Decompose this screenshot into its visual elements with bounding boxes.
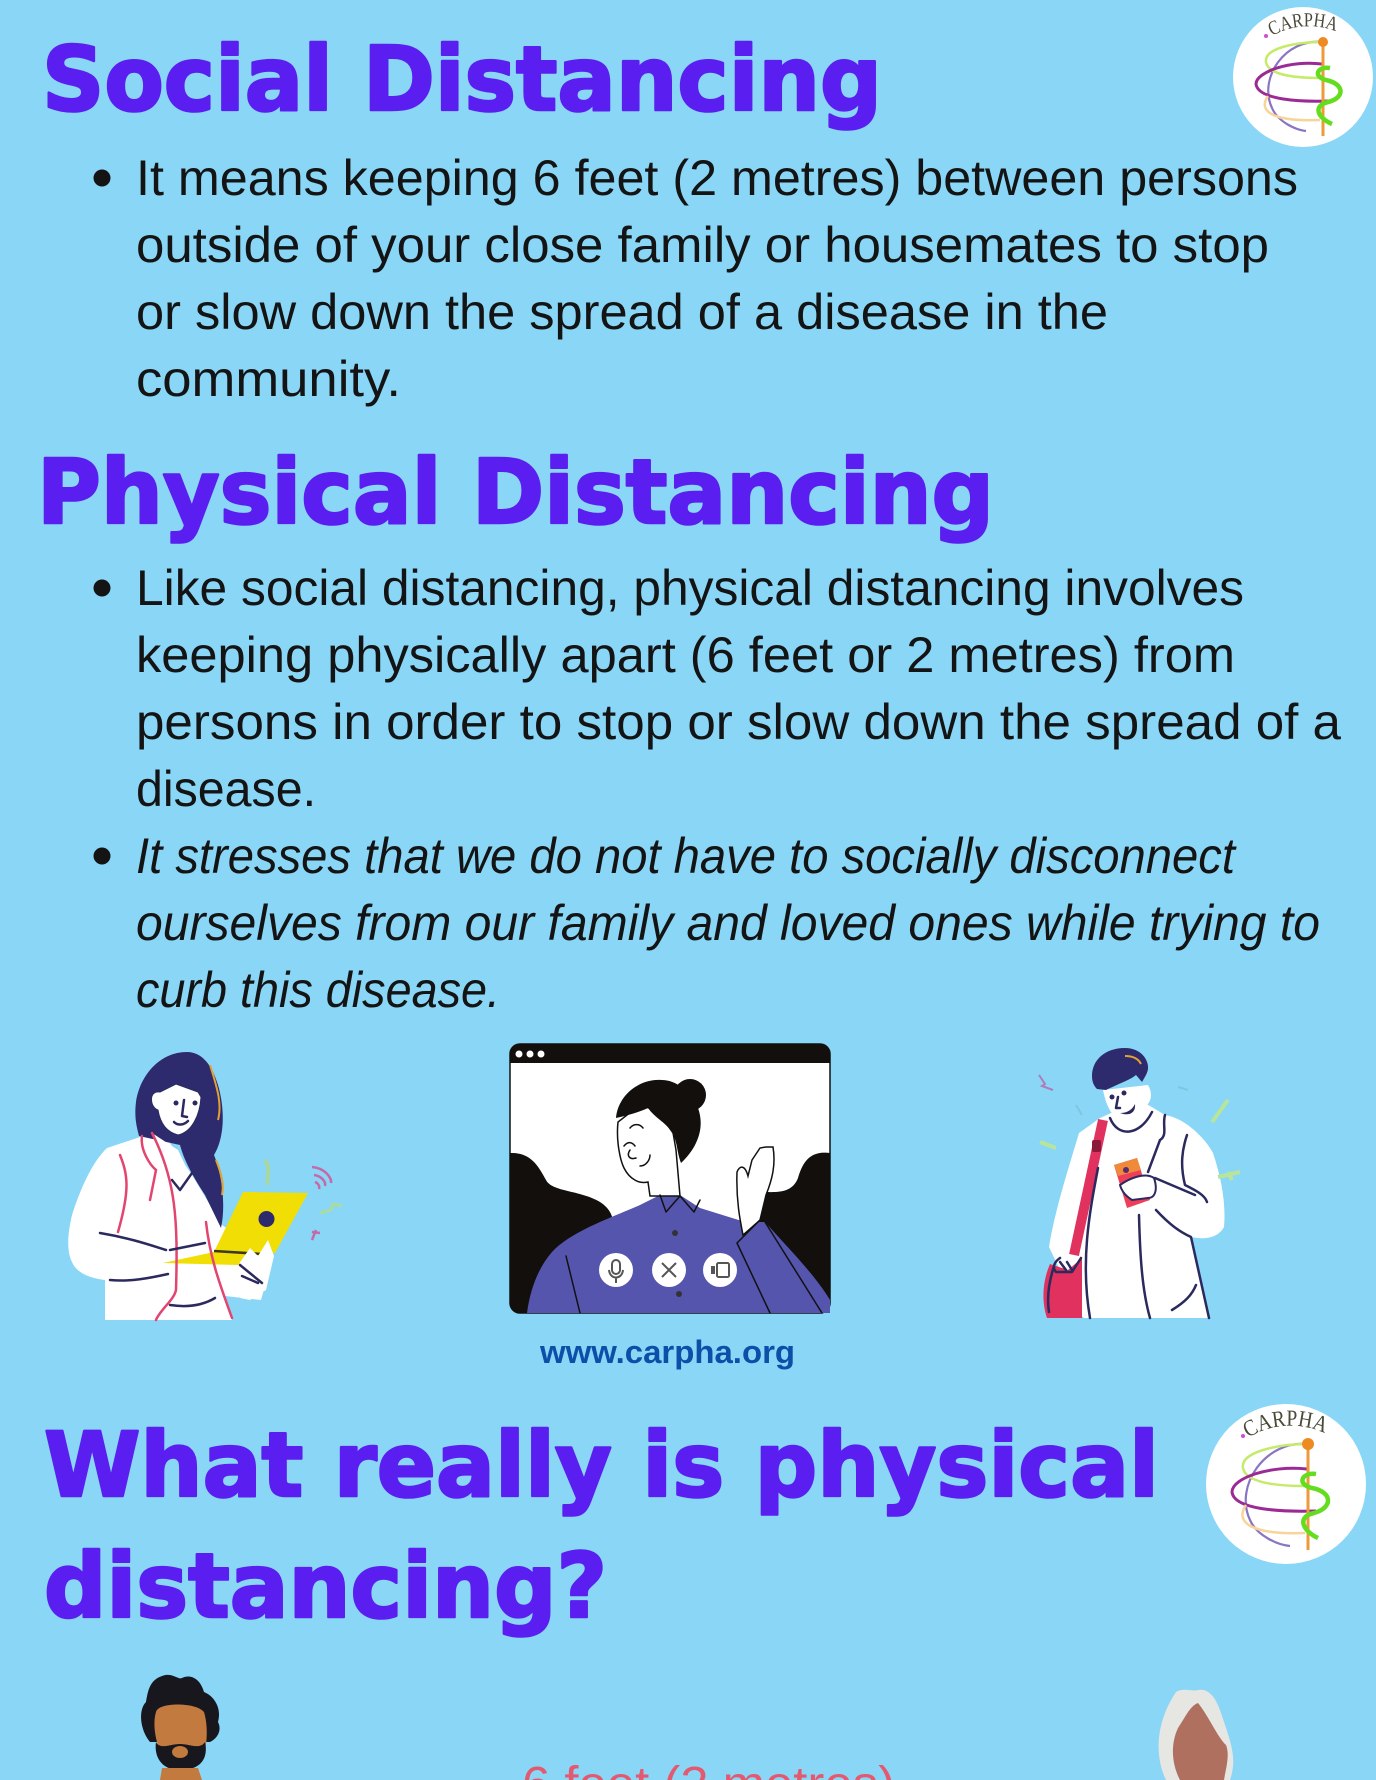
text block: social distancing definition: community. xyxy=(136,351,401,407)
icon: close button xyxy=(652,1253,686,1287)
heading: Social Distancing: Social Distancing xyxy=(42,27,882,131)
text block: social distancing definition: or slow down the spread of a disease in the xyxy=(136,284,1108,340)
website link: www.carpha.org xyxy=(539,1334,795,1370)
logo: CARPHA top: CARPHA xyxy=(1268,13,1336,34)
text block: italic note on staying connected: ourselves from our family and loved ones while trying to xyxy=(136,895,1320,951)
heading: Physical Distancing: Physical Distancing xyxy=(37,440,994,544)
logo: CARPHA top xyxy=(1233,7,1373,147)
text block: physical distancing definition: persons in order to stop or slow down the spread of a xyxy=(136,694,1341,750)
illustration: man with beard (cropped) xyxy=(141,1675,220,1780)
heading: What really is physical distancing?: distancing? xyxy=(44,1534,607,1638)
illustration: older woman with grey hair (cropped) xyxy=(1159,1690,1233,1780)
text block: social distancing definition: outside of your close family or housemates to stop xyxy=(136,217,1269,273)
text block: italic note on staying connected xyxy=(94,828,1320,1018)
bullet xyxy=(94,170,110,186)
text block: italic note on staying connected: curb this disease. xyxy=(136,962,500,1018)
text block: physical distancing definition: disease. xyxy=(136,761,316,817)
logo: CARPHA second: CARPHA xyxy=(1244,1410,1325,1436)
hand holding laptop xyxy=(236,1240,274,1300)
icon: camera button xyxy=(703,1253,737,1287)
text block: italic note on staying connected: It stresses that we do not have to socially disconnect xyxy=(136,828,1237,884)
heading: What really is physical distancing?: What really is physical xyxy=(44,1413,1159,1517)
illustration: video call window xyxy=(510,1044,830,1313)
bullet xyxy=(94,848,110,864)
text block: physical distancing definition: keeping physically apart (6 feet or 2 metres) from xyxy=(136,627,1235,683)
illustration: woman using laptop xyxy=(68,1052,342,1320)
text block: physical distancing definition xyxy=(94,560,1341,817)
icon: microphone button xyxy=(599,1253,633,1287)
bullet xyxy=(94,580,110,596)
logo: CARPHA second xyxy=(1206,1404,1366,1564)
illustration: man looking at phone xyxy=(1039,1048,1240,1318)
text block: physical distancing definition: Like social distancing, physical distancing involves xyxy=(136,560,1244,616)
text block: social distancing definition: It means keeping 6 feet (2 metres) between persons xyxy=(136,150,1298,206)
heading: What really is physical distancing? xyxy=(44,1413,1159,1638)
text block: social distancing definition xyxy=(94,150,1298,407)
